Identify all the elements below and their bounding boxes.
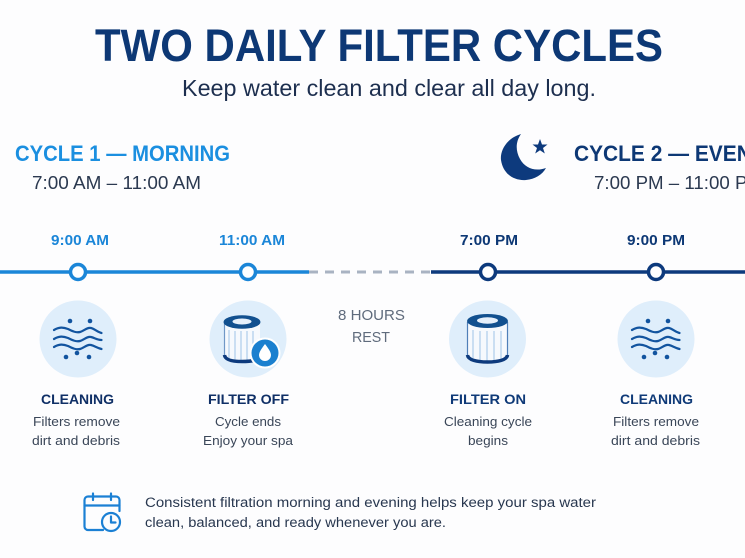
icon: moon and star	[501, 134, 548, 180]
step: cleaning morning: dirt and debris	[32, 433, 121, 448]
icon: cleaning water morning	[40, 300, 116, 378]
step: filter off: Enjoy your spa	[203, 433, 294, 448]
time labels: 9:00 AM	[51, 233, 109, 249]
footer note	[145, 495, 597, 530]
step: cleaning evening: dirt and debris	[611, 433, 701, 448]
step: cleaning evening	[611, 391, 701, 448]
step: filter on	[444, 391, 532, 448]
step: filter on: Cleaning cycle	[444, 414, 532, 429]
icon: filter on	[449, 300, 526, 378]
step: cleaning morning: CLEANING	[41, 391, 114, 407]
step: filter on: FILTER ON	[450, 391, 526, 407]
step: filter off	[203, 391, 294, 448]
time labels: 9:00 PM	[627, 233, 685, 249]
footer note: clean, balanced, and ready whenever you are.	[145, 515, 446, 530]
step: filter off: FILTER OFF	[208, 391, 289, 407]
step: cleaning morning	[32, 391, 121, 448]
time labels	[51, 233, 685, 249]
step: filter on: begins	[468, 433, 509, 448]
timeline	[0, 264, 745, 280]
step: cleaning evening: Filters remove	[613, 414, 699, 429]
step: cleaning evening: CLEANING	[620, 391, 693, 407]
cycle 2 header	[574, 141, 745, 193]
cycle 1 header: CYCLE 1 — MORNING	[15, 141, 230, 166]
cycle 1 header: 7:00 AM – 11:00 AM	[32, 173, 201, 193]
rest label	[338, 308, 405, 346]
icon: filter with water drop	[210, 300, 286, 378]
time labels: 11:00 AM	[219, 233, 285, 249]
cycle 1 header	[15, 141, 230, 193]
step: cleaning morning: Filters remove	[33, 414, 120, 429]
time labels: 7:00 PM	[460, 233, 518, 249]
rest label: 8 HOURS	[338, 308, 405, 324]
subtitle: Keep water clean and clear all day long.	[182, 75, 596, 101]
icon: cleaning water evening	[618, 300, 694, 378]
footer note: Consistent filtration morning and evening helps keep your spa water	[145, 495, 597, 510]
title: TWO DAILY FILTER CYCLES	[95, 20, 663, 71]
icon: calendar with clock	[84, 494, 120, 531]
rest label: REST	[352, 330, 390, 346]
step: filter off: Cycle ends	[215, 414, 282, 429]
